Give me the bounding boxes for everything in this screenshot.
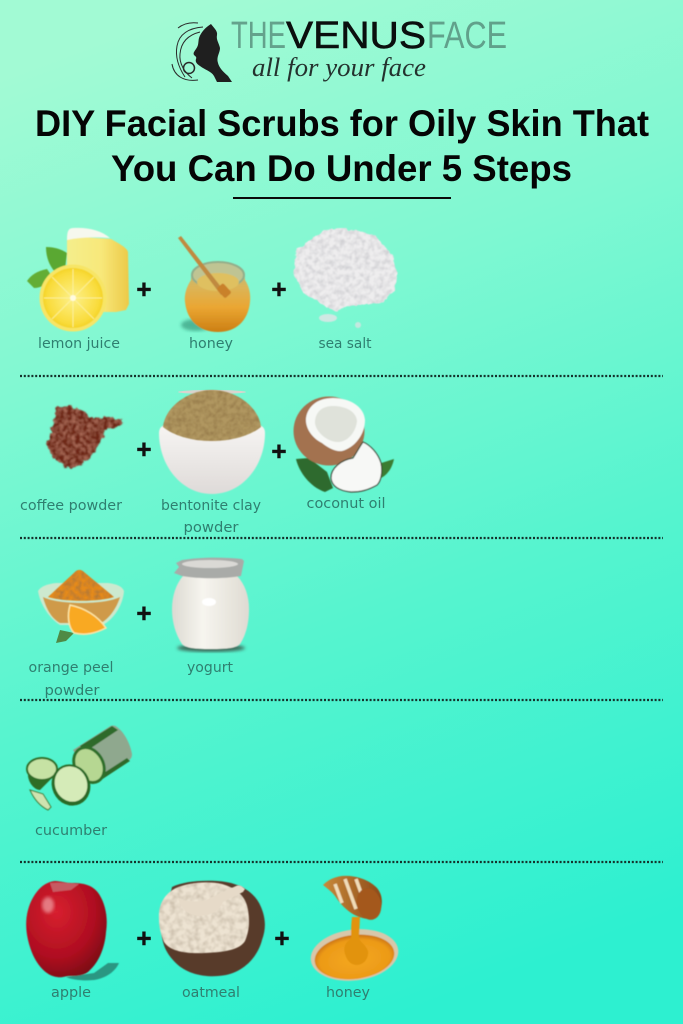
label: orange peel powder: powder bbox=[44, 683, 100, 699]
label: orange peel powder: orange peel bbox=[28, 660, 114, 676]
label: coffee powder: coffee powder bbox=[20, 498, 122, 514]
title: You Can Do Under 5 Steps bbox=[111, 148, 572, 189]
label: bentonite clay powder: powder bbox=[184, 520, 239, 536]
icon: bentonite clay bowl bbox=[159, 390, 265, 494]
row 2 bbox=[20, 390, 394, 536]
divider bbox=[20, 537, 663, 539]
divider bbox=[20, 699, 663, 701]
plus: + bbox=[271, 274, 287, 304]
plus: + bbox=[136, 434, 152, 464]
title: DIY Facial Scrubs for Oily Skin That bbox=[35, 103, 649, 144]
icon: coconut bbox=[294, 396, 394, 492]
wordmark: VENUS bbox=[286, 15, 426, 57]
tagline: all for your face bbox=[252, 53, 426, 82]
logo bbox=[172, 15, 507, 82]
divider bbox=[20, 861, 663, 863]
plus: + bbox=[274, 923, 290, 953]
label: oatmeal: oatmeal bbox=[182, 985, 240, 1001]
label: honey: honey bbox=[326, 985, 370, 1001]
title underline bbox=[233, 197, 451, 199]
label: bentonite clay powder: bentonite clay bbox=[161, 498, 261, 514]
label: lemon juice: lemon juice bbox=[38, 336, 120, 352]
icon: sea salt bbox=[294, 229, 396, 328]
icon: apple bbox=[26, 881, 119, 980]
icon: face with flowing hair bbox=[172, 23, 232, 82]
row 1 bbox=[27, 228, 396, 352]
icon: coffee powder bbox=[47, 406, 125, 468]
icon: yogurt jar bbox=[172, 558, 249, 652]
label: bentonite clay powder bbox=[161, 498, 261, 536]
wordmark bbox=[231, 15, 507, 57]
label: honey: honey bbox=[189, 336, 233, 352]
icon: orange peel powder bbox=[38, 570, 124, 643]
icon: honey jar bbox=[178, 236, 250, 332]
row 4 bbox=[27, 726, 132, 839]
label: sea salt: sea salt bbox=[318, 336, 372, 352]
row 5 bbox=[26, 876, 401, 1001]
divider bbox=[20, 375, 663, 377]
plus: + bbox=[136, 923, 152, 953]
row 3 bbox=[28, 558, 249, 699]
icon: honey dipper and bowl bbox=[308, 876, 401, 986]
label: coconut oil: coconut oil bbox=[306, 496, 386, 512]
plus: + bbox=[271, 436, 287, 466]
label: yogurt: yogurt bbox=[187, 660, 234, 676]
label: cucumber: cucumber bbox=[35, 823, 107, 839]
wordmark: THE bbox=[231, 15, 286, 57]
wordmark: FACE bbox=[427, 15, 507, 57]
icon: cucumber bbox=[27, 726, 132, 812]
icon: lemon juice bbox=[27, 228, 129, 332]
label: apple: apple bbox=[51, 985, 91, 1001]
plus: + bbox=[136, 598, 152, 628]
icon: oatmeal bowl bbox=[159, 881, 265, 976]
label: orange peel powder bbox=[28, 660, 114, 699]
title bbox=[35, 103, 649, 189]
plus: + bbox=[136, 274, 152, 304]
